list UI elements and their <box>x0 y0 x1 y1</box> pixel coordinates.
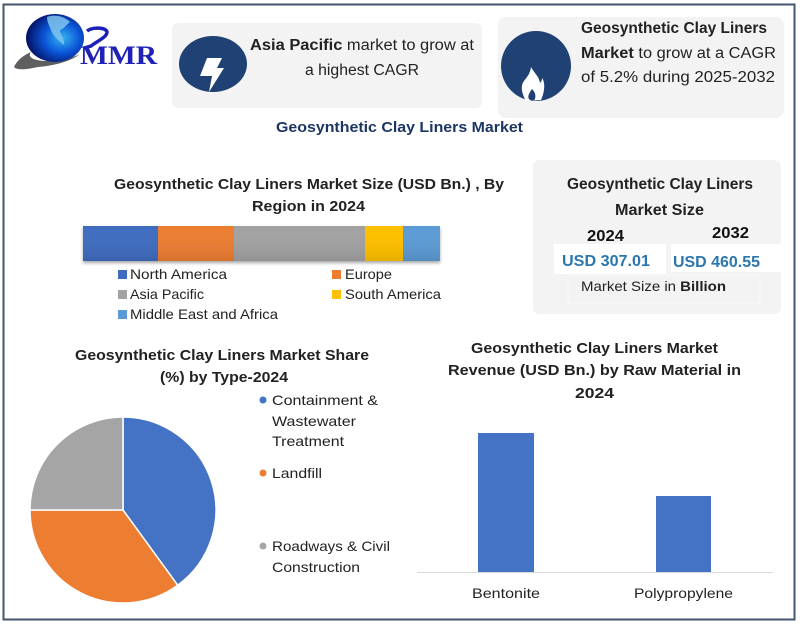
bar chart <box>417 433 773 601</box>
legend: types: Treatment <box>272 433 344 449</box>
panel: market size by region <box>83 176 505 322</box>
callout text: CAGR <box>581 20 776 86</box>
legend: types: Construction <box>272 559 360 575</box>
legend: regions <box>118 266 441 322</box>
heading: revenue: 2024 <box>575 385 615 402</box>
legend: types: Landfill <box>272 465 322 481</box>
callout text: Asia Pacific: a highest CAGR <box>305 62 419 79</box>
heading: market size by region: Geosynthetic Clay Liners Market Size (USD Bn.) , By <box>114 176 505 193</box>
value: 2032: USD 460.55 <box>673 254 760 271</box>
callout text: CAGR: Market to grow at a CAGR <box>581 45 776 62</box>
legend: regions: North America <box>130 266 227 282</box>
legend: types: Wastewater <box>272 413 356 429</box>
title: Geosynthetic Clay Liners Market <box>276 119 523 136</box>
legend: regions: Middle East and Africa <box>130 306 278 322</box>
bar chart: Polypropylene <box>634 585 733 601</box>
stacked bar chart <box>83 226 440 261</box>
heading: market share <box>75 347 369 386</box>
panel: revenue by raw material <box>417 340 773 601</box>
legend: regions: Europe <box>345 266 392 282</box>
callout text: CAGR: of 5.2% during 2025-2032 <box>581 69 775 86</box>
legend: regions: Asia Pacific <box>130 286 204 302</box>
heading: market size by region: Region in 2024 <box>252 198 366 215</box>
value: 2024: USD 307.01 <box>562 253 650 270</box>
heading: market size: Market Size <box>615 202 704 219</box>
heading: market size: Geosynthetic Clay Liners <box>567 176 753 193</box>
value: 2032: 2032 <box>712 225 749 242</box>
note: market size in billion <box>568 275 760 303</box>
value: 2032 <box>671 225 781 272</box>
pie chart <box>30 417 216 603</box>
heading: market share: Geosynthetic Clay Liners Market Share <box>75 347 369 364</box>
callout text: CAGR: Geosynthetic Clay Liners <box>581 20 767 37</box>
logo: MMR globe: MMR <box>80 41 157 70</box>
callout text: Asia Pacific: Asia Pacific market to grow at <box>250 37 475 54</box>
heading: market size <box>567 176 753 219</box>
legend: regions: South America <box>345 286 441 302</box>
note: market size in billion: Market Size in Billion <box>581 278 726 294</box>
logo: MMR globe <box>14 14 157 70</box>
heading: market size by region <box>114 176 505 215</box>
heading: revenue: Geosynthetic Clay Liners Market <box>471 340 718 357</box>
panel: Asia Pacific callout <box>172 23 482 108</box>
legend: types: Containment & <box>272 392 379 408</box>
legend: types <box>260 392 390 575</box>
panel: market size <box>533 160 781 314</box>
legend: types: Roadways & Civil <box>272 538 390 554</box>
bar chart: Bentonite <box>472 585 540 601</box>
icon: flame <box>501 31 571 101</box>
panel: CAGR callout <box>498 17 784 118</box>
icon: lightning bolt <box>179 36 247 92</box>
heading: revenue <box>448 340 741 402</box>
value: 2024: 2024 <box>587 228 624 245</box>
heading: revenue: Revenue (USD Bn.) by Raw Material in <box>448 362 741 379</box>
value: 2024 <box>554 228 666 274</box>
callout text: Asia Pacific <box>250 37 475 79</box>
heading: market share: (%) by Type-2024 <box>160 369 289 386</box>
panel: market share by type <box>30 347 390 603</box>
